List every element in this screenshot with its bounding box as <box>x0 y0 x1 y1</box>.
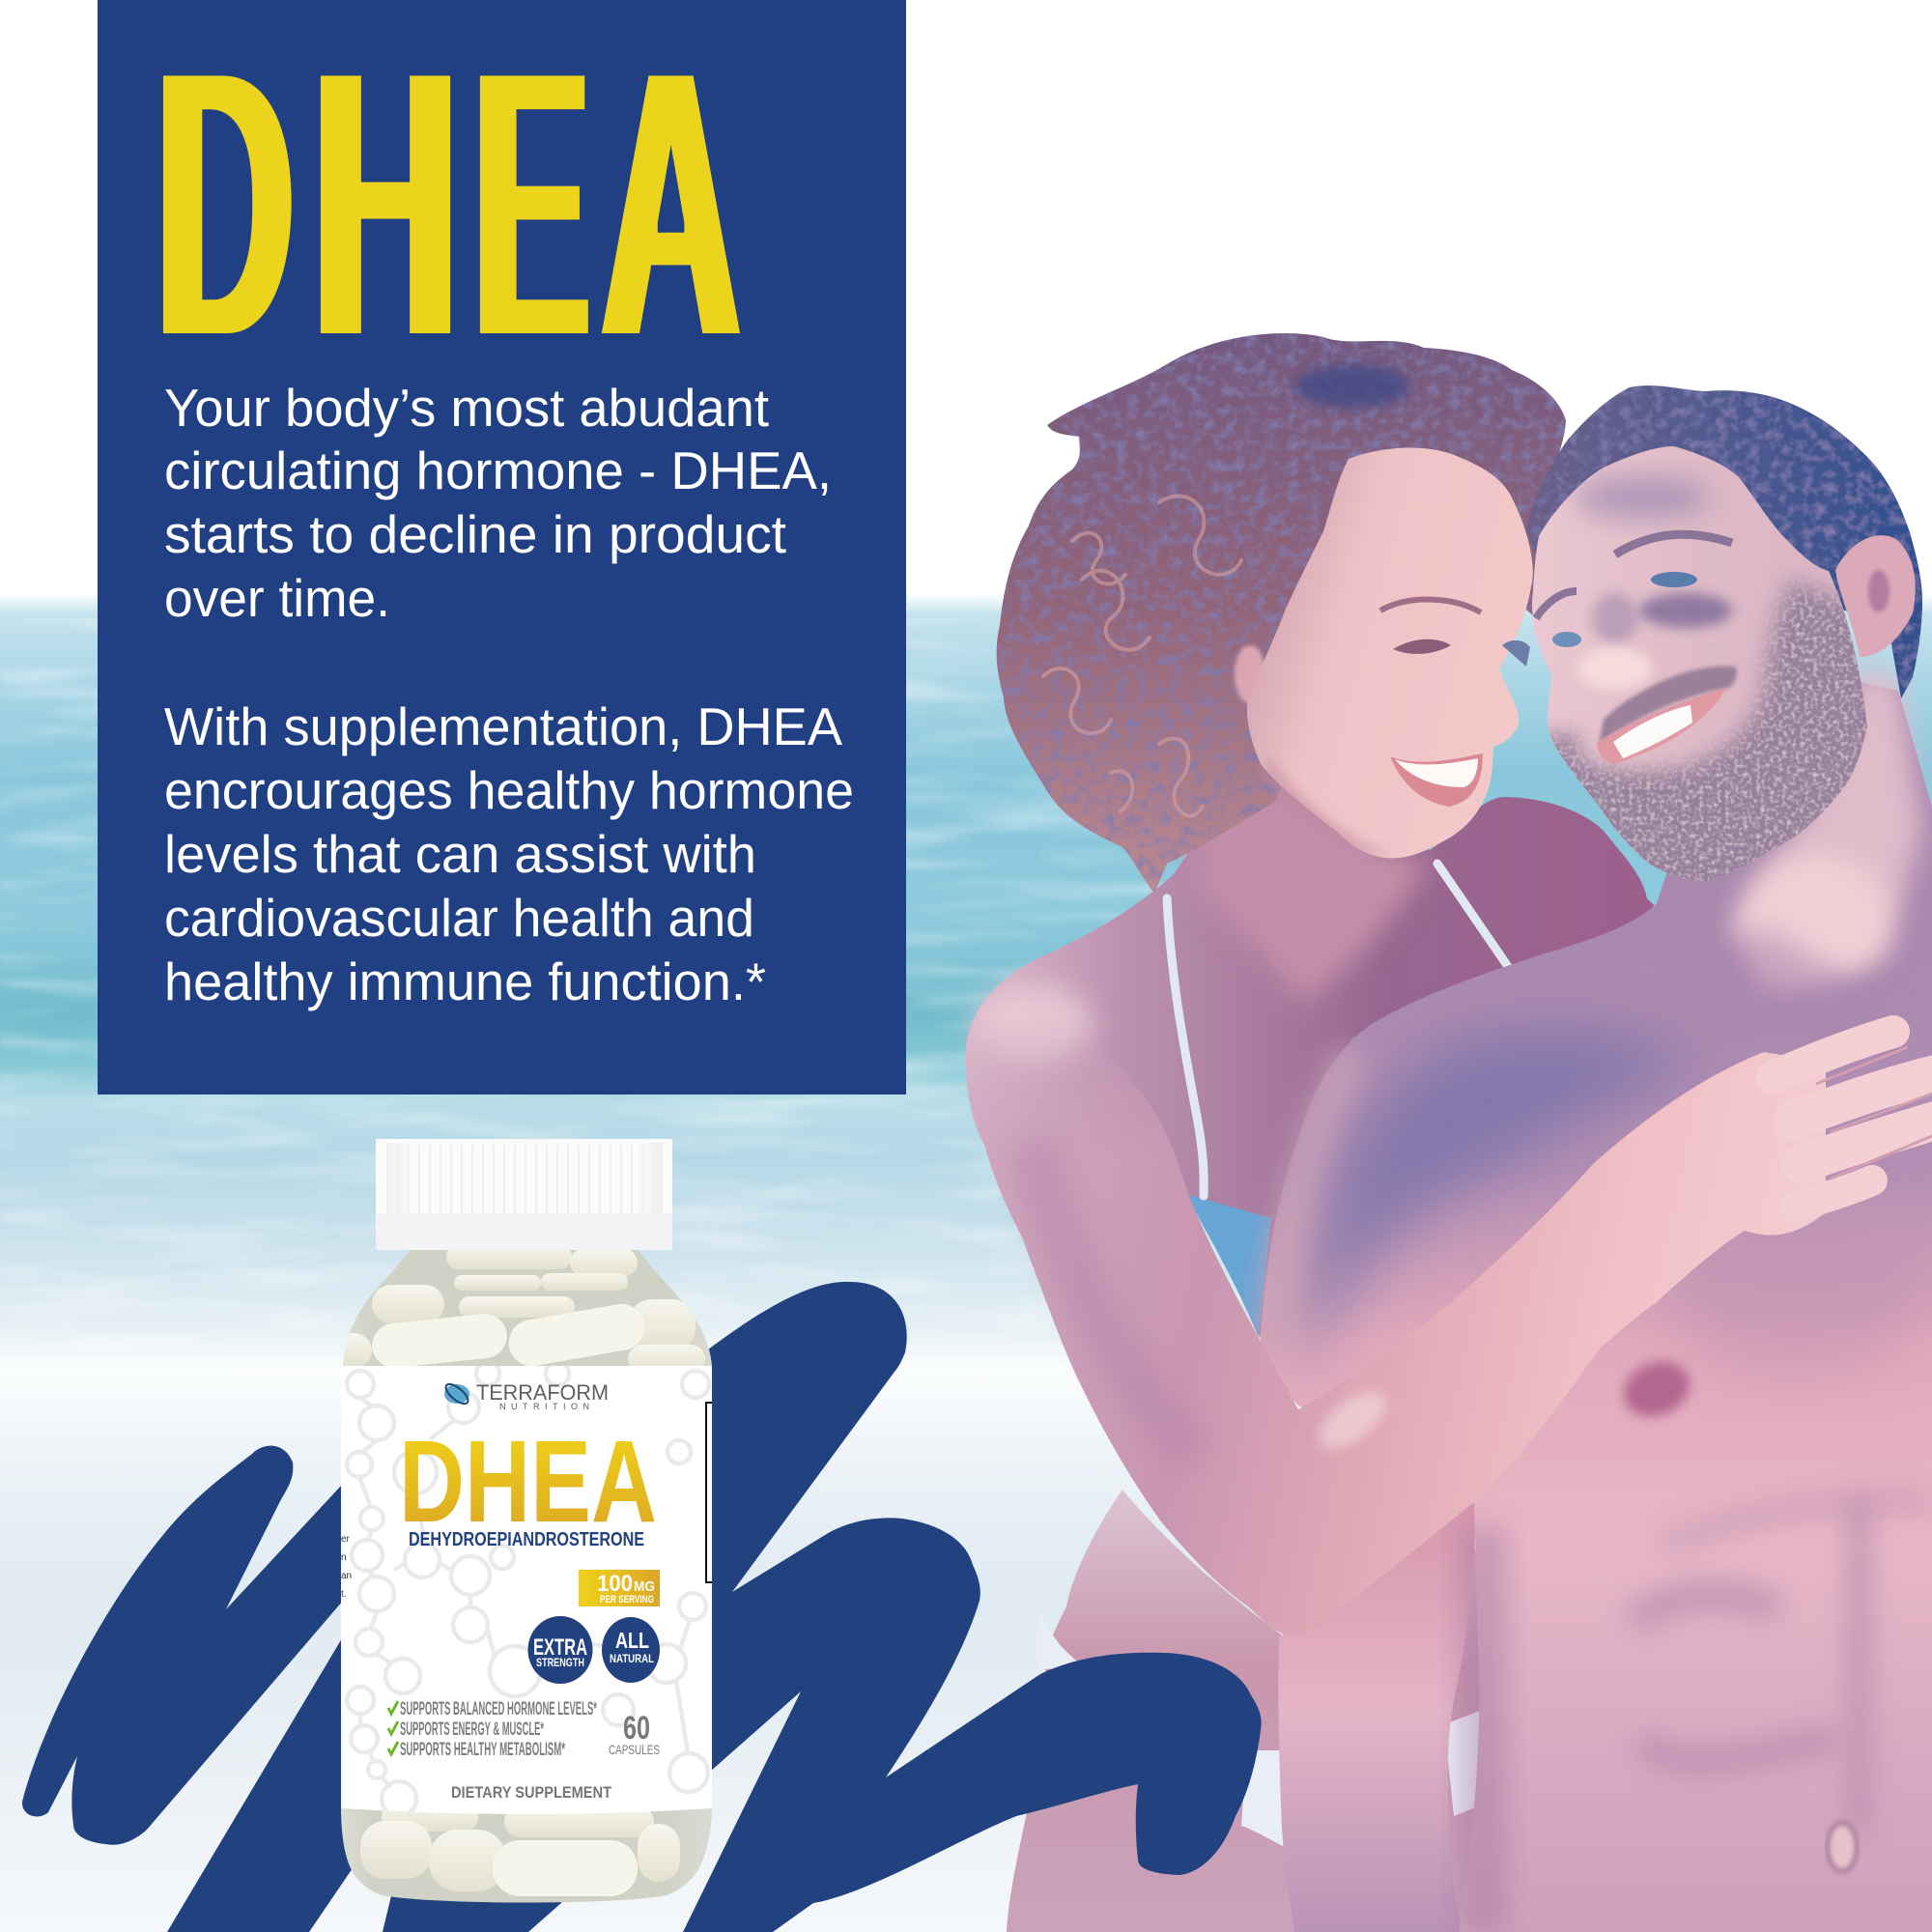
benefits list: SUPPORTS BALANCED HORMONE LEVELS* <box>400 1699 597 1719</box>
product subtitle: DEHYDROEPIANDROSTERONE <box>409 1528 644 1550</box>
side text fragments <box>341 1536 352 1597</box>
bottle cap <box>376 1139 672 1250</box>
man ear <box>1835 535 1916 657</box>
benefits list: SUPPORTS HEALTHY METABOLISM* <box>400 1740 565 1760</box>
fingers <box>1773 1032 1932 1206</box>
capsule count <box>609 1710 660 1757</box>
molecule pattern <box>347 1362 709 1816</box>
man smile <box>1597 688 1726 764</box>
text block: supplementation paragraph: encrourages healthy hormone <box>164 760 854 820</box>
dark hair part <box>1294 365 1410 408</box>
woman smile <box>1390 753 1483 807</box>
woman ear <box>1235 645 1265 703</box>
woman hip and leg <box>1007 1490 1492 1932</box>
dietary supplement line: DIETARY SUPPLEMENT <box>451 1783 612 1802</box>
man brows and eyes <box>1536 534 1732 647</box>
capsule count: 60 <box>623 1710 650 1747</box>
nose bridge shadow <box>1592 593 1638 643</box>
text block: intro paragraph <box>164 378 832 628</box>
elbow highlight <box>1310 1381 1395 1459</box>
woman face <box>1247 447 1533 858</box>
badge: all natural: NATURAL <box>610 1652 654 1665</box>
lower left stroke <box>167 1638 406 1932</box>
curl highlights <box>1043 497 1241 816</box>
man torso and shoulder <box>1261 676 1932 1932</box>
chest hair tint <box>1662 1198 1932 1372</box>
beard <box>1548 572 1867 881</box>
upper arm shading <box>1294 1029 1710 1391</box>
text block: supplementation paragraph <box>164 696 854 1011</box>
text block: intro paragraph: Your body’s most abudant <box>164 378 769 438</box>
badge: extra strength: EXTRA <box>533 1634 587 1661</box>
man nose <box>1578 647 1652 690</box>
text block: supplementation paragraph: healthy immune function.* <box>164 952 766 1011</box>
title: A <box>601 0 741 421</box>
right stroke <box>383 1282 1262 1932</box>
side text fragments: er <box>341 1534 351 1545</box>
supplement facts edge <box>706 1403 712 1582</box>
man hair <box>1526 385 1922 698</box>
dose badge: PER SERVING <box>600 1594 654 1605</box>
arm shading <box>1034 1140 1198 1459</box>
side text fragments: n <box>341 1552 347 1563</box>
text block: supplementation paragraph: levels that can assist with <box>164 824 756 884</box>
dose badge: 100 <box>597 1571 633 1597</box>
neck bright spot <box>1744 855 1889 980</box>
woman jaw shade <box>1265 753 1391 856</box>
brand logo: TERRAFORM <box>476 1380 609 1405</box>
capsule count: CAPSULES <box>609 1742 660 1757</box>
dose badge <box>579 1570 660 1606</box>
abdominal muscle lines <box>1633 1492 1932 1835</box>
title: D <box>156 0 294 421</box>
text block: intro paragraph: over time. <box>164 568 390 628</box>
woman arm and hand <box>964 985 1932 1636</box>
text block: intro paragraph: starts to decline in product <box>164 504 786 564</box>
under eye shadow <box>1639 593 1732 628</box>
supplement bottle <box>328 1139 724 1913</box>
side text fragments: an <box>341 1571 352 1581</box>
man face <box>1532 446 1867 881</box>
panel: blue text box <box>98 0 906 1094</box>
moustache <box>1599 666 1737 744</box>
text block: intro paragraph: circulating hormone - DHEA, <box>164 440 832 500</box>
torso left shadow <box>1459 1526 1507 1932</box>
text block: supplementation paragraph: With supplementation, DHEA <box>164 696 842 756</box>
man lower arm <box>1278 1488 1475 1932</box>
navel <box>1828 1823 1857 1871</box>
bikini straps <box>1167 864 1509 1196</box>
badge: extra strength: STRENGTH <box>536 1656 584 1669</box>
neck light <box>1729 667 1922 995</box>
bottle glass with capsules <box>328 1236 724 1913</box>
text block: supplementation paragraph: cardiovascular health and <box>164 888 754 948</box>
brand logo <box>444 1383 607 1409</box>
dose badge: MG <box>634 1578 655 1595</box>
product name: DHEA <box>399 1415 657 1547</box>
ear inner <box>1868 570 1889 612</box>
benefits list: SUPPORTS ENERGY & MUSCLE* <box>400 1719 544 1740</box>
bottle label <box>341 1362 712 1820</box>
upper arm left rim <box>1273 1053 1352 1352</box>
photo: smiling couple on the beach <box>964 333 1932 1932</box>
side text fragments: t. <box>341 1589 347 1600</box>
woman shoulder light <box>976 983 1092 1065</box>
woman chest <box>966 753 1662 1338</box>
temple shadow <box>1575 476 1710 519</box>
woman hair <box>997 333 1566 894</box>
title <box>156 0 741 421</box>
blue scribble brush stroke <box>22 1282 1262 1932</box>
collar shade <box>1681 927 1893 1043</box>
badge: all natural <box>602 1617 660 1683</box>
woman neck shade <box>1193 753 1430 1005</box>
badge: all natural: ALL <box>615 1628 649 1653</box>
left stroke <box>22 1446 386 1845</box>
title: E <box>474 0 589 420</box>
badge: extra strength <box>527 1616 593 1684</box>
benefits list <box>388 1699 597 1760</box>
bikini top blue <box>1185 1194 1271 1338</box>
nipple <box>1615 1352 1698 1426</box>
finger separation lines <box>1816 1047 1932 1179</box>
white bikini bottom <box>1037 1611 1483 1847</box>
woman eyes and brow <box>1380 600 1530 667</box>
brand logo: NUTRITION <box>499 1402 589 1411</box>
